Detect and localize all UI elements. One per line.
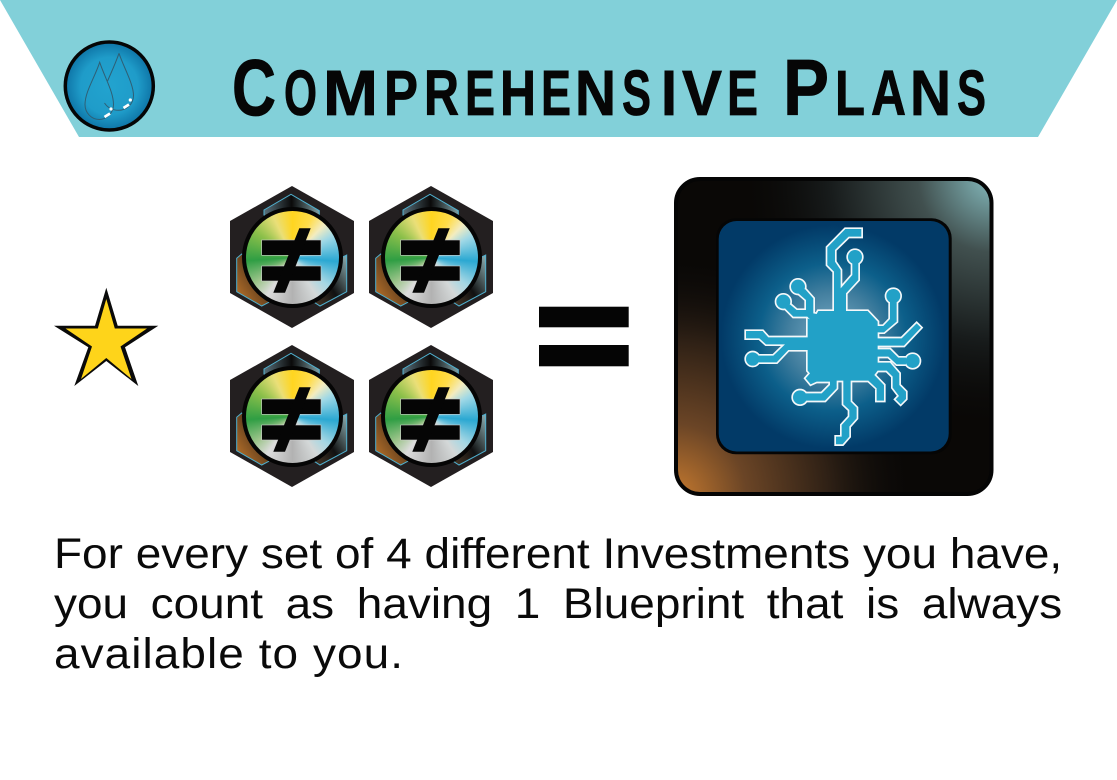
title: E (465, 57, 495, 129)
body text: available to you. (54, 630, 404, 678)
icon: circuit (746, 229, 921, 444)
title: R (424, 57, 459, 129)
title: P (783, 43, 829, 132)
icon: blueprint chip tile (674, 177, 994, 496)
title: E (727, 57, 758, 129)
title: I (661, 57, 677, 129)
title (232, 43, 986, 132)
title: S (622, 57, 651, 129)
title: L (835, 57, 865, 129)
title: E (541, 57, 571, 129)
icon: investment hexagon 4 (369, 345, 493, 487)
header banner (0, 0, 1117, 137)
title: P (384, 57, 418, 129)
title: O (284, 57, 317, 129)
icon: water drops badge (64, 40, 156, 132)
icon: investment hexagon 1 (230, 186, 354, 328)
icon: equals sign (539, 306, 629, 366)
title: H (500, 57, 536, 129)
title: S (957, 57, 986, 129)
title: C (232, 43, 276, 132)
icon: investment hexagon 2 (369, 186, 493, 328)
body text (54, 530, 1062, 678)
title: M (323, 57, 378, 129)
icon: star (54, 288, 158, 386)
title: N (575, 57, 616, 129)
body text: you count as having 1 Blueprint that is always (54, 580, 1062, 628)
body text: For every set of 4 different Investments you have, (54, 530, 1062, 578)
title: A (871, 57, 906, 129)
title: V (682, 57, 722, 129)
title: N (910, 57, 951, 129)
icon: investment hexagon 3 (230, 345, 354, 487)
